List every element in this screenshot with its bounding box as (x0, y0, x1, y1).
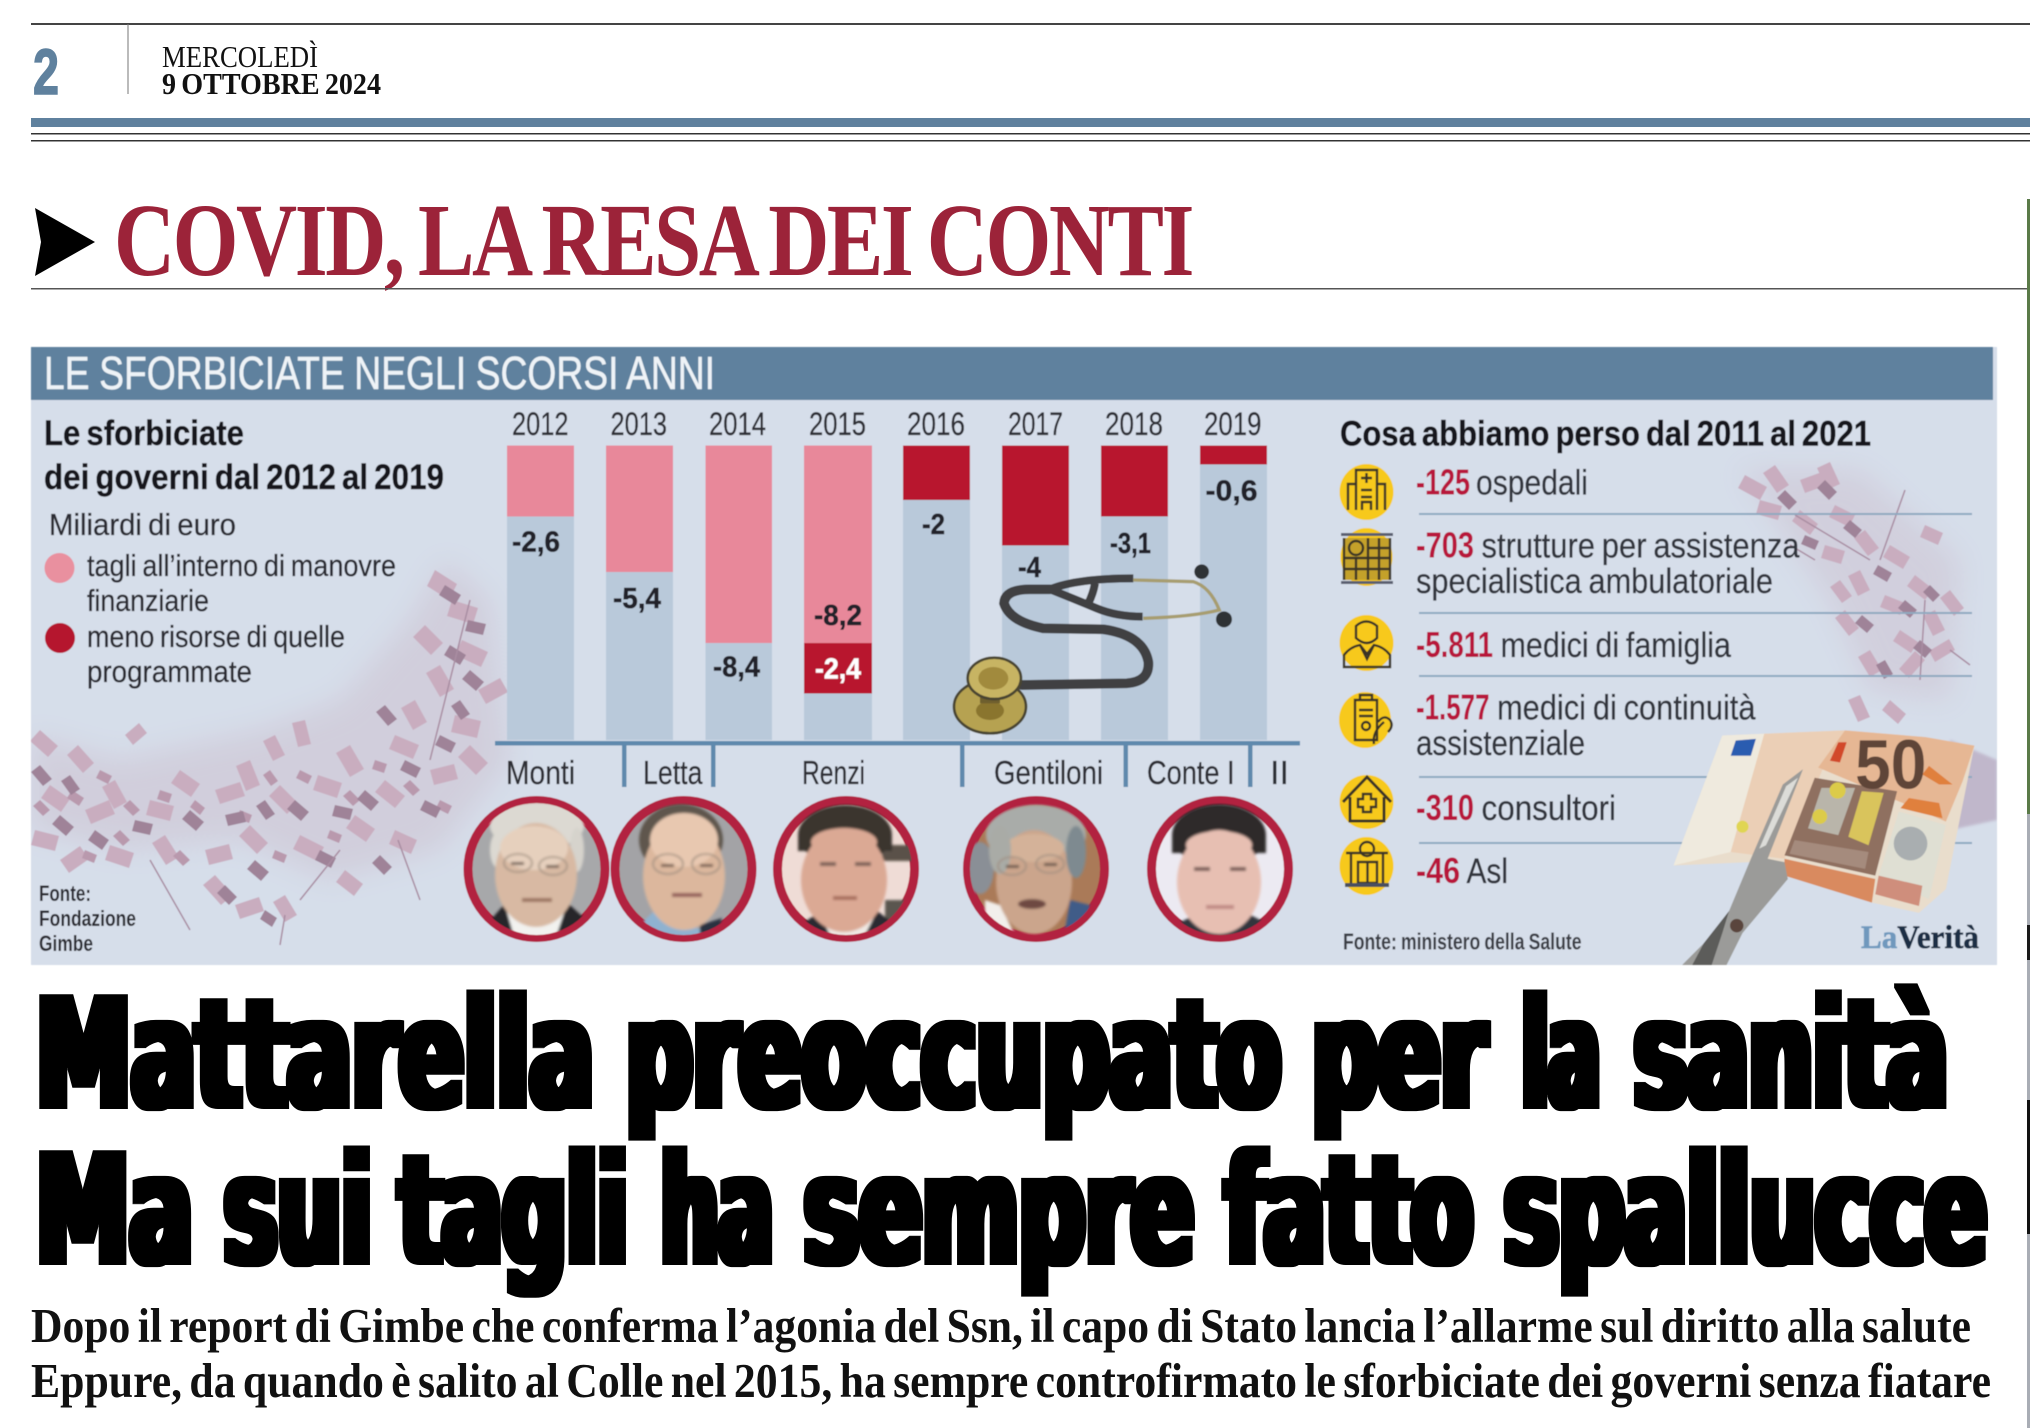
row: Asl (1340, 837, 1508, 895)
year labels: 2012 (512, 406, 568, 442)
row: ospedali (1340, 462, 1588, 520)
headline line 2: fatto (1225, 1122, 1473, 1299)
bar 2012 (507, 446, 574, 740)
row: strutture (1340, 524, 1800, 601)
arrow (35, 208, 95, 276)
bar chart (495, 406, 1300, 787)
legend title (44, 414, 444, 497)
year labels: 2015 (809, 406, 866, 442)
source left: Gimbe (39, 931, 93, 956)
bar 2018 (1101, 446, 1168, 740)
headline line 2: Ma (36, 1122, 193, 1299)
bar 2015 (804, 446, 872, 740)
section heading (35, 183, 1192, 298)
headline line 2: ha (661, 1122, 773, 1299)
source left (39, 881, 136, 956)
icon: outpatient facility (1340, 528, 1393, 586)
year labels: 2018 (1105, 406, 1163, 442)
year labels: 2014 (709, 406, 766, 442)
source left: Fondazione (39, 906, 136, 931)
portrait: Monti (464, 796, 610, 950)
bar 2018: -3,1 (1110, 528, 1151, 560)
headline line 1: per (1312, 966, 1486, 1143)
legend title: dei governi dal 2012 al 2019 (44, 458, 444, 497)
bar 2013: -5,4 (613, 583, 661, 615)
logo: LaVerità (1861, 920, 1979, 956)
bar 2019: -0,6 (1206, 476, 1258, 508)
date: MERCOLEDÌ (162, 39, 318, 74)
row: medici di continuità: medici di continuità (1497, 688, 1756, 728)
right edge strip of neighbouring page (2027, 199, 2030, 1428)
flying banknotes left (30, 560, 510, 945)
masthead: page number and date (31, 23, 2030, 108)
bar 2019 (1200, 446, 1267, 740)
bar 2016: -2 (922, 509, 945, 541)
bar 2016 (903, 446, 970, 740)
year labels: 2013 (610, 406, 667, 442)
bar 2012: -2,6 (512, 526, 560, 558)
portrait: Gentiloni (963, 796, 1109, 942)
bar 2014: -8,4 (713, 652, 760, 684)
row: medici di continuità (1339, 686, 1756, 763)
headline line 1: preoccupato (626, 966, 1281, 1143)
axis with government ticks (495, 741, 1300, 787)
headline line 1 (36, 966, 1948, 1143)
row: consultori (1340, 775, 1616, 829)
legend: fewer resources: meno risorse di quelle (87, 619, 345, 654)
headline line 2: sui (224, 1122, 372, 1299)
unit: Miliardi di euro (49, 507, 236, 542)
legend: cuts: tagli all’interno di manovre (87, 548, 396, 583)
portrait: Conte (1147, 796, 1293, 950)
year labels: 2016 (907, 406, 965, 442)
row: medici di continuità: -1.577 (1416, 686, 1490, 728)
row: medici di continuità: assistenziale (1416, 724, 1585, 763)
icon: health agency building (1340, 837, 1394, 895)
row: medici di famiglia: medici di famiglia (1500, 626, 1731, 665)
icon: doctor (1340, 615, 1394, 671)
illustration: 50 euro note and scissors: 50 (1855, 725, 1926, 804)
right list block (1339, 414, 1972, 954)
page number: 2 (33, 36, 59, 108)
row: strutture: strutture per assistenza (1482, 526, 1800, 566)
row: ospedali: -125 (1416, 462, 1470, 502)
bar 2015: -8,2 (814, 600, 862, 632)
government names: Conte I (1147, 754, 1234, 791)
row: strutture: -703 (1416, 524, 1474, 566)
year labels: 2017 (1008, 406, 1063, 442)
row: medici di famiglia (1340, 615, 1731, 671)
year labels: 2019 (1204, 406, 1262, 442)
icon: clipboard and stethoscope (1339, 692, 1392, 748)
government names: II (1270, 754, 1289, 791)
source right: Fonte: ministero della Salute (1343, 928, 1582, 954)
flying banknotes right (1738, 462, 1997, 830)
icon: clinic house (1340, 775, 1394, 829)
panel header: LE SFORBICIATE NEGLI SCORSI ANNI (44, 347, 715, 399)
bar 2017 (1002, 446, 1069, 740)
legend: fewer resources (45, 619, 345, 689)
panel header (31, 347, 1993, 400)
subheadline (31, 1298, 1991, 1408)
headline line 2: tagli (399, 1122, 628, 1299)
bar 2017: -4 (1018, 552, 1041, 584)
row: Asl: Asl (1466, 852, 1508, 891)
headline line 1: Mattarella (36, 966, 594, 1143)
bar 2014 (706, 446, 772, 740)
portrait: Letta (610, 796, 756, 950)
headline line 2 (36, 1122, 1987, 1299)
date (162, 39, 381, 101)
bar 2013 (606, 446, 673, 740)
government names: Renzi (802, 754, 865, 791)
date: 9 OTTOBRE 2024 (162, 66, 381, 101)
row: medici di famiglia: -5.811 (1416, 624, 1493, 665)
legend title: Le sforbiciate (44, 414, 244, 453)
legend: cuts (44, 548, 396, 618)
row: consultori: -310 (1416, 787, 1474, 828)
year labels (512, 406, 1262, 442)
headline line 1: la (1522, 966, 1600, 1143)
bar 2015: -2,4 (815, 654, 861, 686)
icon: stethoscope (954, 564, 1232, 733)
government names (506, 754, 1289, 791)
government names: Gentiloni (994, 754, 1103, 791)
section title: COVID, LA RESA DEI CONTI (114, 183, 1192, 298)
source left: Fonte: (39, 881, 91, 906)
masthead rule band (31, 118, 2030, 142)
government names: Monti (506, 754, 575, 791)
list title: Cosa abbiamo perso dal 2011 al 2021 (1340, 414, 1871, 454)
panel: infographic (30, 347, 1997, 970)
row: strutture: specialistica ambulatoriale (1416, 562, 1773, 601)
row: ospedali: ospedali (1476, 464, 1588, 502)
legend: fewer resources: programmate (87, 654, 252, 689)
row: Asl: -46 (1416, 850, 1460, 891)
left legend block (44, 414, 444, 689)
legend: cuts: finanziarie (87, 583, 209, 618)
headline line 2: sempre (804, 1122, 1194, 1299)
government names: Letta (643, 754, 703, 791)
illustration: 50 euro note and scissors (1674, 725, 1974, 970)
row: consultori: consultori (1482, 789, 1616, 828)
portrait: Renzi (773, 796, 919, 950)
icon: hospital (1340, 464, 1394, 520)
main headline (36, 966, 1987, 1299)
